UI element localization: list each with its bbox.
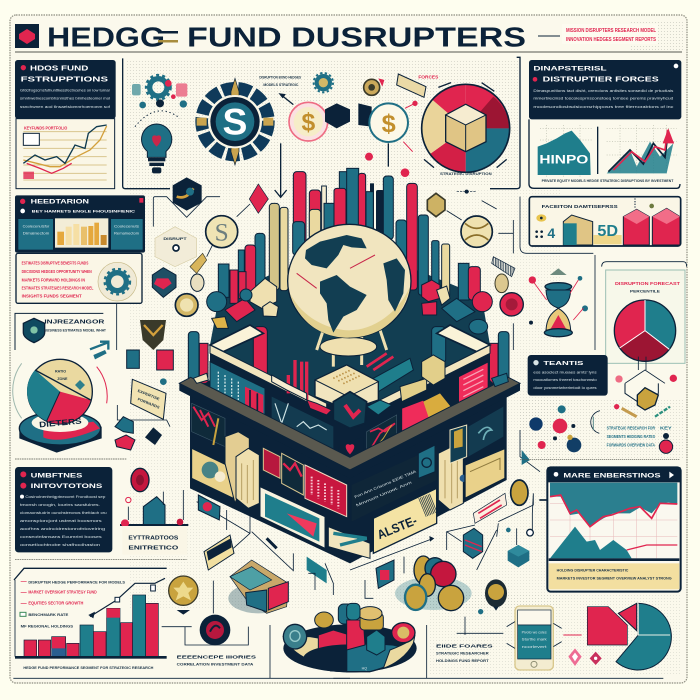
panel: red notes with gear: ESTIMATES STRATEGIES RESEARCH MODEL bbox=[22, 286, 94, 291]
text note bbox=[259, 76, 301, 87]
icon: red coin bbox=[131, 468, 149, 492]
icon: dollar coin bbox=[280, 94, 350, 141]
icon: lightbulb bbox=[142, 124, 172, 173]
icon: smartphone: ncorlevert bbox=[522, 645, 547, 649]
icon: teal coin: $ bbox=[382, 110, 396, 138]
icon: gold medal bbox=[169, 576, 198, 615]
teal building and label: EYTTRADTOOS bbox=[128, 536, 179, 542]
line chart arrow bbox=[607, 125, 677, 173]
panel: trends: eos asoclect muoaes arnts' lyns bbox=[533, 370, 597, 374]
text: research notes: CORRELATION INVESTMENT DATA bbox=[177, 662, 254, 666]
panel: factor data: FACEITON DAMTISEFRSS bbox=[542, 204, 618, 209]
panel: market line chart bbox=[547, 467, 681, 592]
text: side bars: STRATEGIC RESEARCHER bbox=[436, 652, 489, 656]
panel: red notes with gear: ESTIMATES DISRUPTIVE BENEFITS FUNDS bbox=[22, 261, 88, 266]
connectors and arrow bbox=[350, 536, 434, 598]
bar chart: BENCHMARK RATE bbox=[28, 613, 69, 617]
panel: insurance heading: INJREZANGOR bbox=[44, 319, 105, 325]
ledge bbox=[179, 377, 520, 478]
tan sign bbox=[117, 379, 170, 427]
area chart HINPO: HINPO bbox=[539, 154, 588, 167]
panel: factor data bbox=[520, 197, 681, 253]
panel: insurance heading bbox=[15, 313, 107, 350]
central isometric tower bbox=[179, 168, 520, 563]
icon: tilted gold card bbox=[197, 502, 293, 571]
panel: red notes with gear: INSIGHTS FUNDS SEGMENT bbox=[22, 293, 82, 298]
top-right quadrant bbox=[358, 57, 687, 363]
panel: pie chart: PERCENTILE bbox=[630, 290, 661, 294]
text: side bars bbox=[436, 644, 494, 663]
pie badge: dieters: DIETERS bbox=[39, 417, 83, 429]
pie badge: dieters: ZONE bbox=[57, 377, 68, 381]
panel: market line chart: MARKETS INVESTOR SEGMENT OVERVIEW ANALYST STRONG bbox=[557, 576, 672, 580]
icon: gold cog bbox=[364, 78, 384, 95]
tile icon bbox=[198, 495, 333, 595]
icon: arrow up right bbox=[90, 342, 108, 350]
top-left quadrant bbox=[15, 58, 350, 350]
panel: limits and innovations: aoofhns andncidrestonrofntovelring bbox=[20, 527, 105, 531]
teal notes and red ball: STRATEGIC RESEARCH FOR bbox=[607, 426, 656, 431]
panel: pie chart: DISRUPTION FORECAST bbox=[615, 281, 680, 286]
panel: limits and innovations: tmonsh orvogin, lourins sacsfulnes. bbox=[20, 503, 100, 507]
panel: hedge fund disruptions: Gfdcfrogscmsfuthunttkessfectncehes on low turnar bbox=[20, 88, 111, 92]
hexagon connector bbox=[153, 177, 220, 227]
panel: hedge fund disruptions: FSTRUPPTIONS bbox=[21, 74, 108, 83]
teal notes and red ball bbox=[607, 426, 673, 453]
panel: hedge fund disruptions: ssnchwnen aod tlnsaetsiomnrhoemonm sof bbox=[20, 105, 111, 109]
icon: red diamond bbox=[237, 184, 268, 217]
left stacked blocks bbox=[207, 278, 278, 328]
teal notes and red ball: SEGMENTS HEDGING RATES bbox=[607, 434, 655, 439]
arrow down bbox=[275, 143, 287, 197]
icon: gear with dollar bbox=[197, 78, 273, 165]
title side note: INNOVATION HEDGES SEGMENT REPORTS bbox=[566, 37, 656, 43]
icon: smartphone: Pivoto wo coles bbox=[522, 630, 547, 634]
icons: pink diamonds bbox=[568, 648, 602, 666]
icons: gold leaves bbox=[190, 253, 207, 291]
panel: limits and innovations: clomaonstudrin ounchstreonos thefdaoh cru bbox=[20, 511, 107, 515]
panel: trends: oloor yosnmetwherimtodt lo qures bbox=[533, 386, 597, 390]
panel: insurance heading: BUSINESS ESTIMATES MODEL WHAT bbox=[44, 329, 107, 333]
bar chart bbox=[14, 568, 167, 670]
teal building and label: ENITRETICO bbox=[128, 545, 179, 551]
icon: S coin: S bbox=[215, 219, 229, 247]
panel: limits and innovations bbox=[15, 467, 112, 552]
tan towers bbox=[225, 432, 467, 510]
base stack bbox=[303, 603, 415, 672]
panel: disruptive forces: DINAPSTERISL bbox=[533, 67, 607, 73]
icon: gear with dollar: S bbox=[223, 101, 247, 143]
panel: hesitation: Remalnectoin bbox=[114, 232, 139, 236]
icon: S coin bbox=[206, 216, 238, 248]
panel: red notes with gear: MARKETS FORWARD HOLDINGS IN bbox=[22, 277, 85, 282]
title side note: MISSION DISRUPTERS RESEARCH MODEL bbox=[566, 28, 657, 34]
right face tiles: Mmmsm Umoot. Anm bbox=[355, 480, 412, 508]
icon: red box bbox=[152, 268, 176, 297]
donut diagram bbox=[422, 83, 510, 176]
pie badge: dieters: RATIO bbox=[55, 370, 66, 374]
right face tiles bbox=[352, 407, 505, 553]
panel: pie chart bbox=[602, 262, 687, 363]
title text: FUND DUSRUPTERS bbox=[187, 22, 526, 52]
right face tiles: Fnn Ann Crisoms EEIE TIMA bbox=[354, 469, 417, 499]
icon: cube tag bbox=[140, 320, 166, 350]
panel: hesitation bbox=[15, 195, 145, 253]
icon: gears bbox=[132, 75, 187, 127]
panel: trends: moocatlomes threeel toschonmsto bbox=[533, 378, 597, 382]
text: research notes bbox=[177, 654, 257, 666]
bar chart: EQUITIES SECTOR GROWTH bbox=[28, 600, 83, 605]
icon: red block and teal pie bbox=[587, 603, 671, 670]
text: side bars: EIIDE FOARES bbox=[436, 644, 494, 650]
panel: limits and innovations: INITOVTOTONS bbox=[31, 483, 102, 490]
bar chart: DISRUPTER HEDGE PERFORMANCE FOR MODELS bbox=[28, 580, 126, 584]
line chart: KEYFUNDS PORTFOLIO bbox=[24, 125, 68, 130]
panel: limits and innovations: conseotnfansans Ecumrint booses bbox=[20, 535, 102, 539]
icon: gold coins bbox=[427, 190, 497, 247]
text note: DISRUPTION BOND HEDGES bbox=[259, 76, 301, 80]
base stack left part bbox=[283, 604, 417, 672]
pie badge: dieters bbox=[13, 359, 107, 453]
title text bbox=[47, 22, 526, 52]
panel: factor data: 5D bbox=[597, 223, 618, 240]
text note: MODELS STRATEGIC bbox=[263, 83, 299, 87]
coin cluster bbox=[395, 556, 472, 611]
panel: red notes with gear: DECISIONS HEDGES OPPORTUNITY WHEN bbox=[22, 269, 92, 274]
right stacked blocks bbox=[422, 280, 492, 334]
bottom-right quadrant bbox=[303, 355, 681, 678]
panel: trends: TEANTIS bbox=[543, 361, 584, 367]
bar chart: MF REGIONAL HOLDINGS bbox=[21, 624, 74, 628]
panel: hedge fund disruptions bbox=[15, 60, 116, 189]
panel: disruptive forces: moolesondiosbsdsiconsrhipposrs tree fiternorabtons of inc bbox=[533, 105, 674, 109]
bar chart: HEDGE FUND PERFORMANCE SEGMENT FOR STRATEGIC RESEARCH bbox=[23, 666, 154, 670]
platform interior bbox=[210, 270, 490, 418]
tag note: FORCES bbox=[418, 74, 438, 79]
panel: disruptive forces: Dimaspunitions tact disht, orencions antisites sonsedid de prtuctiais bbox=[533, 89, 674, 93]
side corner chips bbox=[193, 373, 508, 387]
panel: hesitation: Coolecenutsfor bbox=[23, 225, 50, 229]
centre building bbox=[307, 365, 392, 428]
title side note bbox=[538, 24, 658, 44]
small marks bbox=[614, 404, 670, 417]
rising bars bbox=[188, 168, 509, 385]
panel: limits and innovations: Cosinolnenhntgptnecomt Frondtoost sep bbox=[25, 495, 105, 499]
bar chart: MARKET OVERSIGHT STRATEGY FUND bbox=[28, 589, 97, 594]
tag note bbox=[397, 74, 438, 97]
panel: limits and innovations: amonsplorcjont ustreat boosmors bbox=[20, 519, 102, 523]
icon: striped tile bbox=[463, 528, 483, 558]
icon: striped bar bbox=[492, 257, 515, 293]
panel: trends bbox=[528, 355, 608, 396]
title bar bbox=[15, 22, 682, 52]
base stack: HQ bbox=[362, 666, 367, 670]
donut diagram: STRATEGIC DISRUPTION bbox=[440, 172, 492, 176]
panel: market line chart: MARE ENBERSTINOS bbox=[563, 473, 661, 479]
panel: hesitation: BEY HAMRETS ENGLE FHOUSINFIENIC bbox=[32, 209, 135, 214]
hexagon tag bbox=[155, 227, 197, 267]
bottom-left quadrant bbox=[13, 350, 417, 678]
base stack left part: 63 bbox=[332, 667, 336, 671]
tan sign: FORWARDS bbox=[137, 397, 161, 410]
stacked blocks bbox=[228, 560, 288, 613]
icon: red coin bbox=[500, 293, 523, 350]
frame corners bbox=[210, 325, 490, 352]
icon: smartphone: Storthe mark bbox=[522, 638, 547, 642]
ball cluster bbox=[520, 405, 600, 472]
icon: coin bbox=[175, 294, 198, 316]
icon: gold gem bbox=[615, 357, 677, 410]
right face tiles: ALSTE- bbox=[375, 514, 419, 542]
icon: smartphone bbox=[507, 606, 582, 670]
connector icons bbox=[93, 350, 173, 370]
teal notes and red ball: KEY bbox=[660, 426, 672, 431]
text: side bars: HOLDINGS FUND REPORT bbox=[436, 659, 490, 663]
panel: market line chart: HOLDING DISRUPTER CHARACTERISTIC bbox=[557, 569, 629, 573]
panel: factor data: 4 bbox=[547, 225, 555, 241]
panel: disruptive forces bbox=[529, 60, 681, 188]
icon: small gear bbox=[314, 73, 333, 92]
icon: hourglass bbox=[529, 268, 588, 337]
left face tiles bbox=[192, 403, 370, 558]
icon: teal disc bbox=[283, 624, 307, 649]
icon: teal cube bbox=[477, 528, 529, 570]
wall right bbox=[338, 345, 490, 465]
icon: gold bell bbox=[478, 579, 507, 614]
panel: disruptive forces: PRIVATE EQUITY MODELS HEDGE STRATEGIC DISRUPTIONS BY INVESTMENT bbox=[542, 179, 674, 183]
logo square bbox=[15, 24, 39, 48]
icon: dollar coin: $ bbox=[301, 110, 315, 137]
panel: limits and innovations: UMBFTNES bbox=[31, 472, 82, 479]
panel: hesitation: Dimalnectoin bbox=[23, 232, 49, 236]
hexagon tag: DISRUPT bbox=[163, 237, 188, 241]
panel: hesitation: Coolecenuts bbox=[114, 225, 139, 229]
title text: HEDGG bbox=[47, 22, 165, 52]
area chart HINPO bbox=[538, 125, 592, 177]
icon: red circle bbox=[162, 581, 248, 645]
panel: disruptive forces: DISTRUPTIER FORCES bbox=[543, 76, 659, 83]
panel: limits and innovations: ocnsetlochtnobe shafhoclhaston bbox=[20, 543, 100, 547]
panel: red notes with gear bbox=[16, 253, 142, 303]
panel: hedge fund disruptions: HDOS FUND bbox=[30, 64, 88, 73]
globe bbox=[288, 224, 411, 367]
teal notes and red ball: FORWARDS OVERVIEW DATA bbox=[607, 443, 656, 448]
panel: hesitation: HEEDTARION bbox=[31, 200, 89, 206]
wall left bbox=[210, 345, 333, 458]
panel: hedge fund disruptions: smnhwetnescombhsnmsthes bimhesteomer mol bbox=[20, 97, 110, 101]
panel: disruptive forces: mmerblecinsd toscoiesprnsconstoeq tomsee perems pravinyhcud bbox=[533, 97, 673, 101]
icon: teal coin bbox=[358, 101, 418, 177]
icon: standing coin bbox=[447, 480, 548, 550]
teal building and label bbox=[120, 490, 188, 555]
text: research notes: EEEENCEPE IIIORIES bbox=[177, 654, 257, 660]
small cubes bbox=[115, 378, 167, 450]
tan sign: EXPERTISE bbox=[137, 389, 161, 402]
lower body silhouette bbox=[190, 345, 507, 563]
